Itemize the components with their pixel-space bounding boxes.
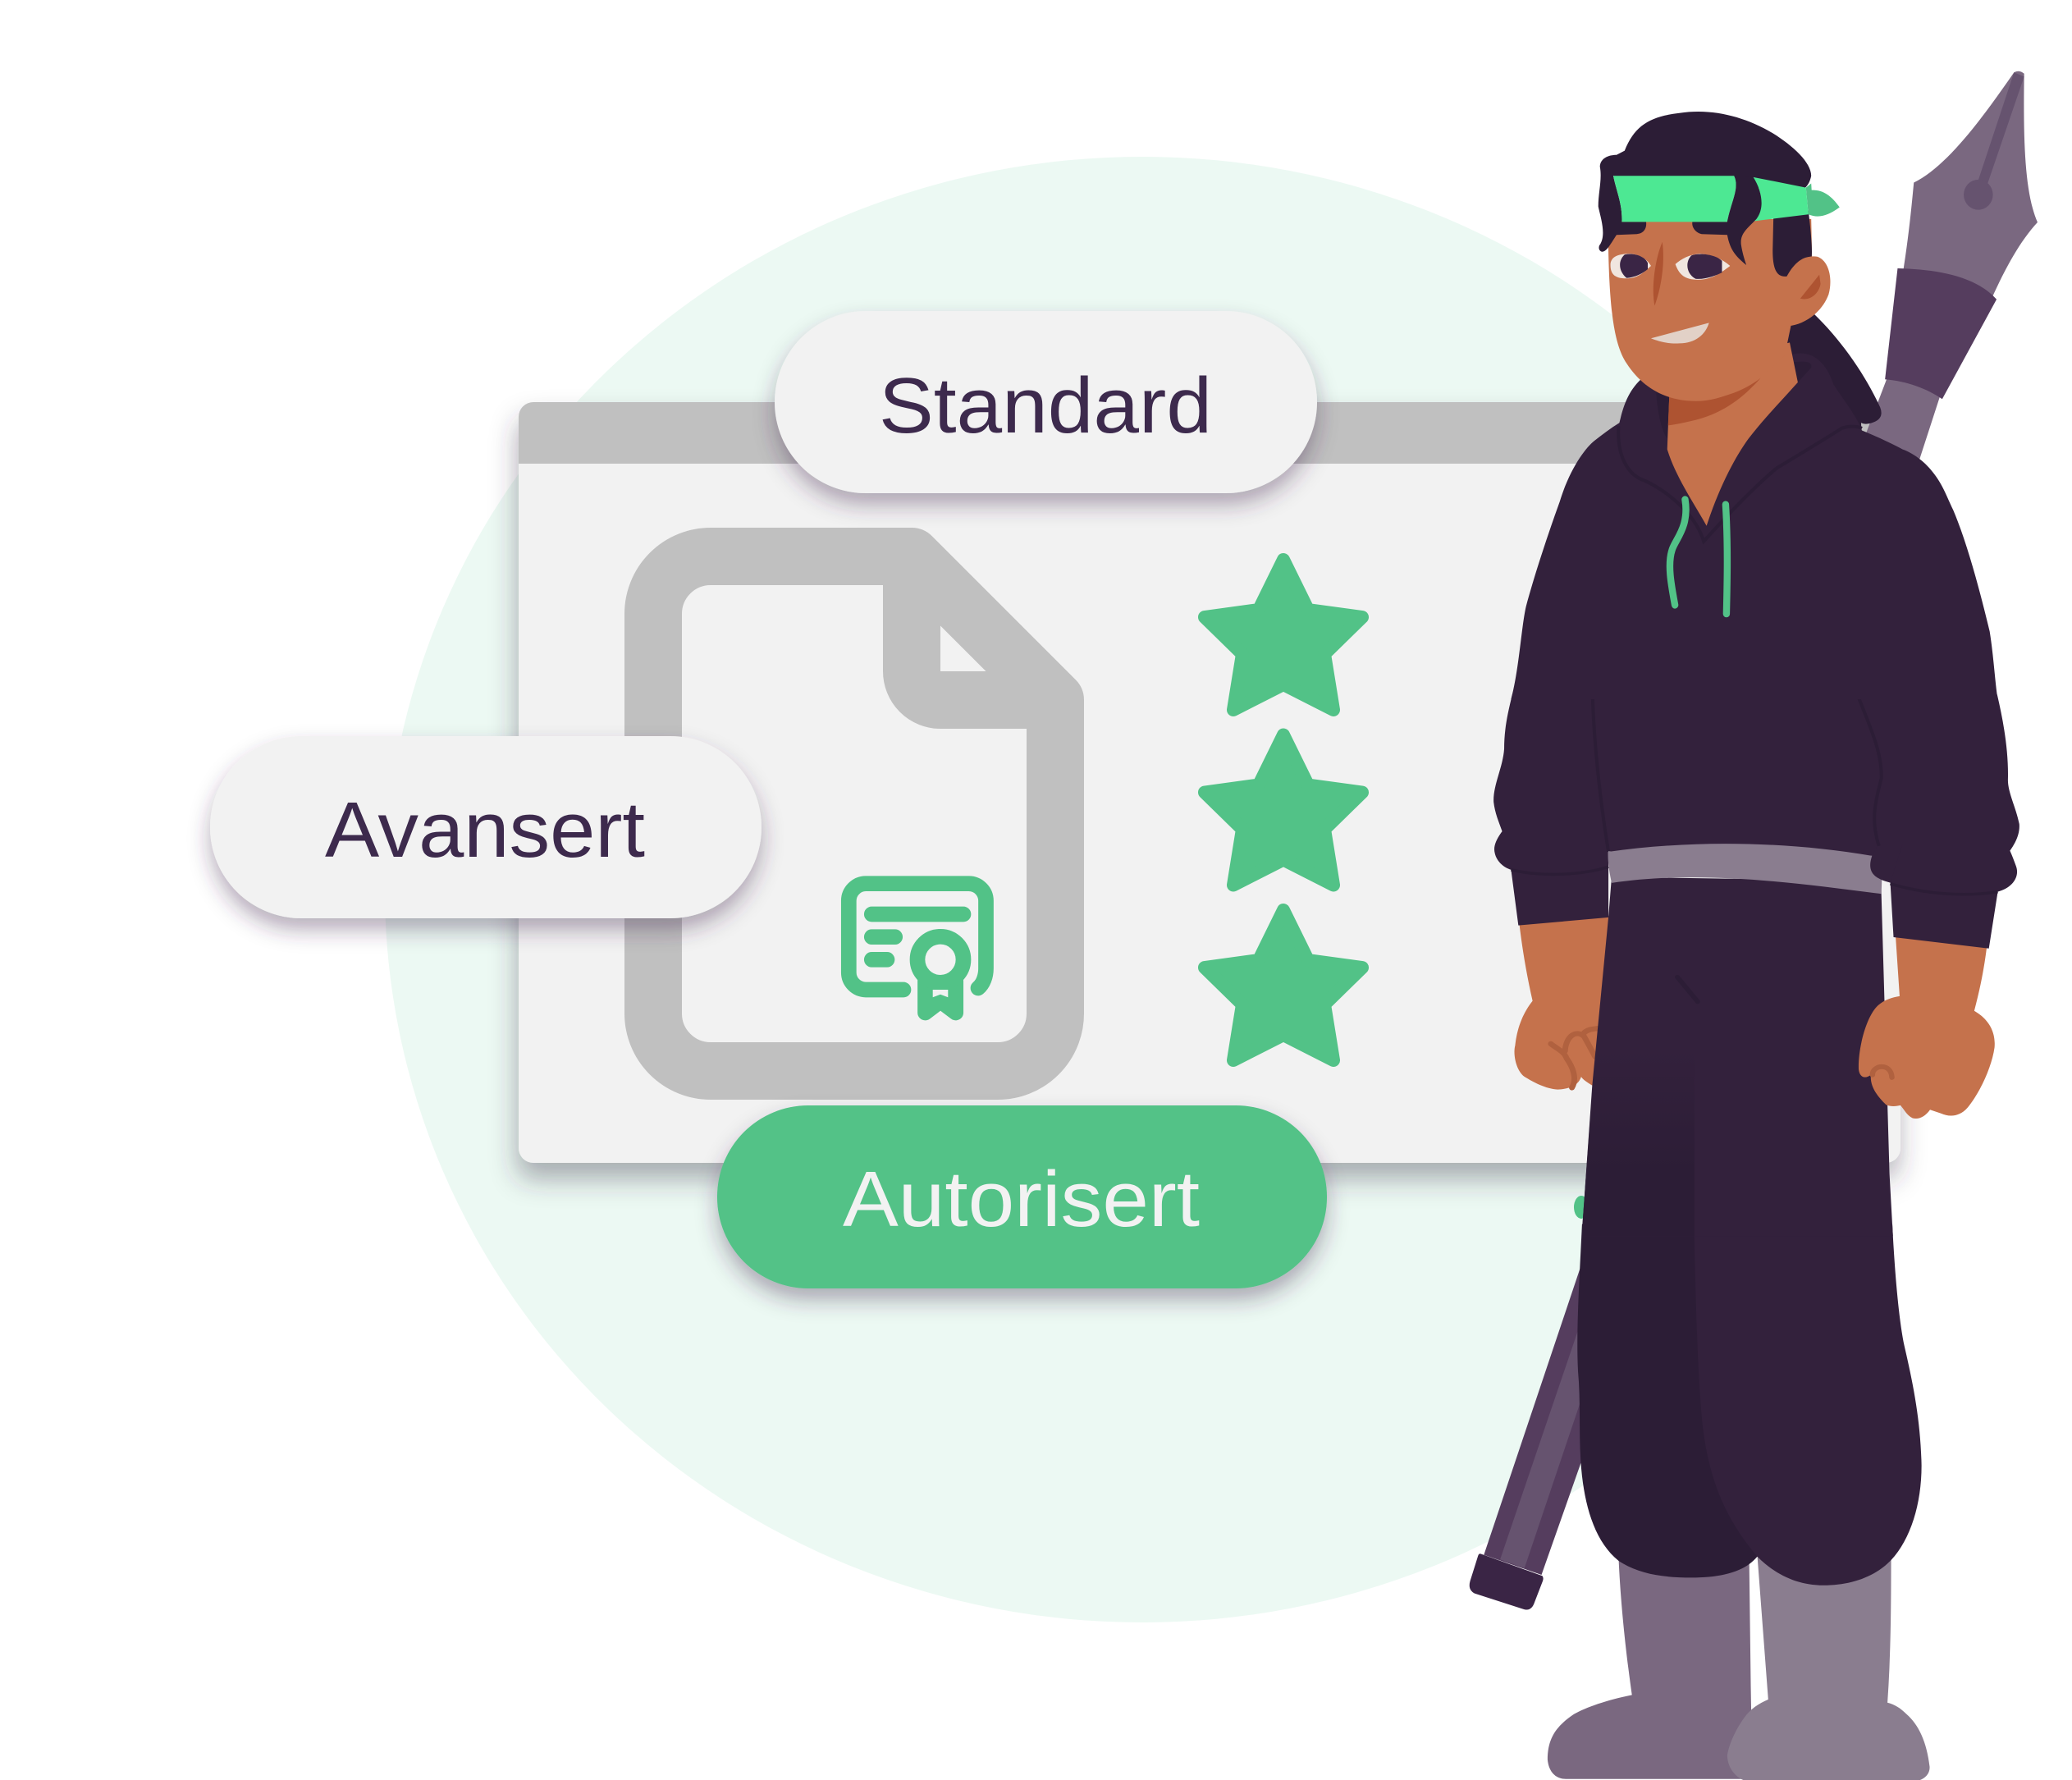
star 2 xyxy=(1205,735,1362,885)
hair xyxy=(1599,112,1812,277)
pen barrel and cap xyxy=(1470,1262,1586,1610)
panel: browser window xyxy=(519,402,1900,1163)
hair lock over headband xyxy=(1727,176,1762,265)
pill: Standard xyxy=(775,311,1317,493)
nose xyxy=(1653,242,1663,305)
lower trouser legs xyxy=(1577,1224,1922,1586)
pill: Autorisert xyxy=(717,1105,1327,1288)
hood back xyxy=(1783,313,1882,443)
pill: Autorisert: Autorisert xyxy=(843,1155,1200,1243)
icon: document xyxy=(653,556,1055,1071)
left arm and fist xyxy=(1515,916,1611,1090)
face xyxy=(1608,219,1814,401)
star 1 xyxy=(1205,560,1362,710)
mouth xyxy=(1651,323,1709,344)
background circle xyxy=(385,157,1900,1622)
head xyxy=(1599,112,1840,401)
boots xyxy=(1548,1555,1930,1780)
pill: Standard: Standard xyxy=(879,362,1212,450)
neck xyxy=(1663,342,1798,526)
headband tail xyxy=(1806,183,1840,217)
hoodie drawstrings xyxy=(1670,500,1727,614)
fountain pen xyxy=(1470,71,2038,1610)
sleeve edge over belt xyxy=(1870,844,1902,882)
trousers xyxy=(1577,877,1922,1586)
rating stars xyxy=(1205,560,1362,1060)
character xyxy=(1493,112,2019,1780)
ear xyxy=(1785,256,1830,326)
star 3 xyxy=(1205,910,1362,1060)
eyes xyxy=(1611,254,1730,280)
pill: Avansert xyxy=(210,736,762,918)
upper trousers xyxy=(1581,877,1893,1236)
green tab behind trousers xyxy=(1574,1196,1589,1219)
pill: Avansert: Avansert xyxy=(325,786,645,874)
pen nib and collar xyxy=(1864,71,2038,462)
window header bar xyxy=(519,402,1900,464)
hoodie upper body xyxy=(1511,342,1998,699)
green headband xyxy=(1613,176,1809,222)
belt xyxy=(1608,844,1882,894)
right arm and fist xyxy=(1859,936,1995,1119)
icon: certificate xyxy=(848,884,986,1013)
hoodie lower body and sleeves xyxy=(1493,694,2019,949)
